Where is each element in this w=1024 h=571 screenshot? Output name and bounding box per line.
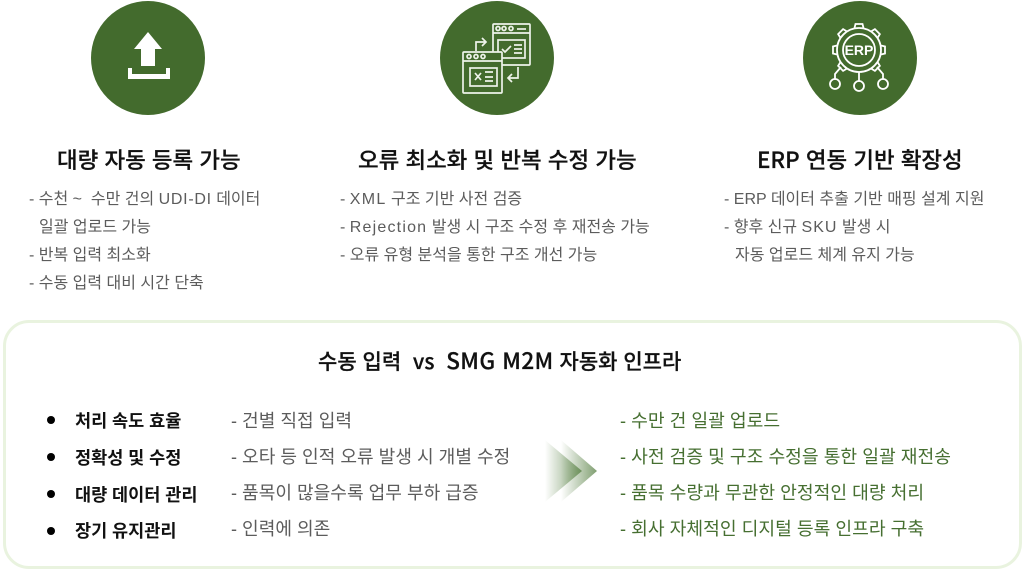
arrow: double chevron xyxy=(547,442,597,500)
icon: ERP gear: ERP xyxy=(845,42,873,58)
manual column text: - 건별 직접 입력 xyxy=(231,411,352,431)
automated column text xyxy=(620,411,951,539)
text: ERP scalability details: - 향후 신규 SKU 발생 시 xyxy=(724,219,891,236)
label: speed: 처리 속도 효율 xyxy=(75,411,181,431)
bullet 2 xyxy=(47,453,55,461)
icon: upload xyxy=(91,1,205,115)
text: ERP scalability details: 자동 업로드 체계 유지 가능 xyxy=(735,247,915,264)
manual column text: - 인력에 의존 xyxy=(231,519,330,539)
automated column text: - 사전 검증 및 구조 수정을 통한 일괄 재전송 xyxy=(620,447,951,467)
manual column text: - 품목이 많을수록 업무 부하 급증 xyxy=(231,483,479,503)
text: error minimisation details xyxy=(340,190,650,264)
text: bulk registration details xyxy=(29,190,260,292)
text: ERP scalability details: - ERP 데이터 추출 기반 매핑 설계 지원 xyxy=(724,190,984,208)
panel: comparison xyxy=(3,320,1022,569)
text: bulk registration details: - 반복 입력 최소화 xyxy=(29,247,151,264)
label: accuracy: 정확성 및 수정 xyxy=(75,448,181,468)
automated column text: - 회사 자체적인 디지털 등록 인프라 구축 xyxy=(620,519,924,539)
text: error minimisation details: - XML 구조 기반 사전 검증 xyxy=(340,190,522,208)
heading: error minimisation: 오류 최소화 및 반복 수정 가능 xyxy=(358,143,637,175)
manual column text xyxy=(231,411,510,539)
icon: windows xyxy=(440,1,554,115)
label: long-term: 장기 유지관리 xyxy=(75,521,176,541)
icon: ERP gear xyxy=(803,1,917,115)
heading: ERP scalability: ERP 연동 기반 확장성 xyxy=(757,143,963,175)
text: bulk registration details: 일괄 업로드 가능 xyxy=(39,219,151,236)
automated column text: - 수만 건 일괄 업로드 xyxy=(620,411,780,431)
text: error minimisation details: - 오류 유형 분석을 통한 구조 개선 가능 xyxy=(340,247,597,264)
comparison title: 수동 입력 vs SMG M2M 자동화 인프라 xyxy=(318,344,681,376)
bullet 3 xyxy=(47,490,55,498)
text: bulk registration details: - 수동 입력 대비 시간 단축 xyxy=(29,275,204,292)
automated column text: - 품목 수량과 무관한 안정적인 대량 처리 xyxy=(620,483,924,503)
heading: bulk registration: 대량 자동 등록 가능 xyxy=(57,143,241,175)
bullet 1 xyxy=(47,416,55,424)
bullet 4 xyxy=(47,527,55,535)
text: ERP scalability details xyxy=(724,190,984,264)
label: bulk data: 대량 데이터 관리 xyxy=(75,485,197,505)
text: error minimisation details: - Rejection 발생 시 구조 수정 후 재전송 가능 xyxy=(340,219,650,236)
manual column text: - 오타 등 인적 오류 발생 시 개별 수정 xyxy=(231,447,510,467)
text: bulk registration details: - 수천 ~ 수만 건의 UDI-DI 데이터 xyxy=(29,190,260,208)
